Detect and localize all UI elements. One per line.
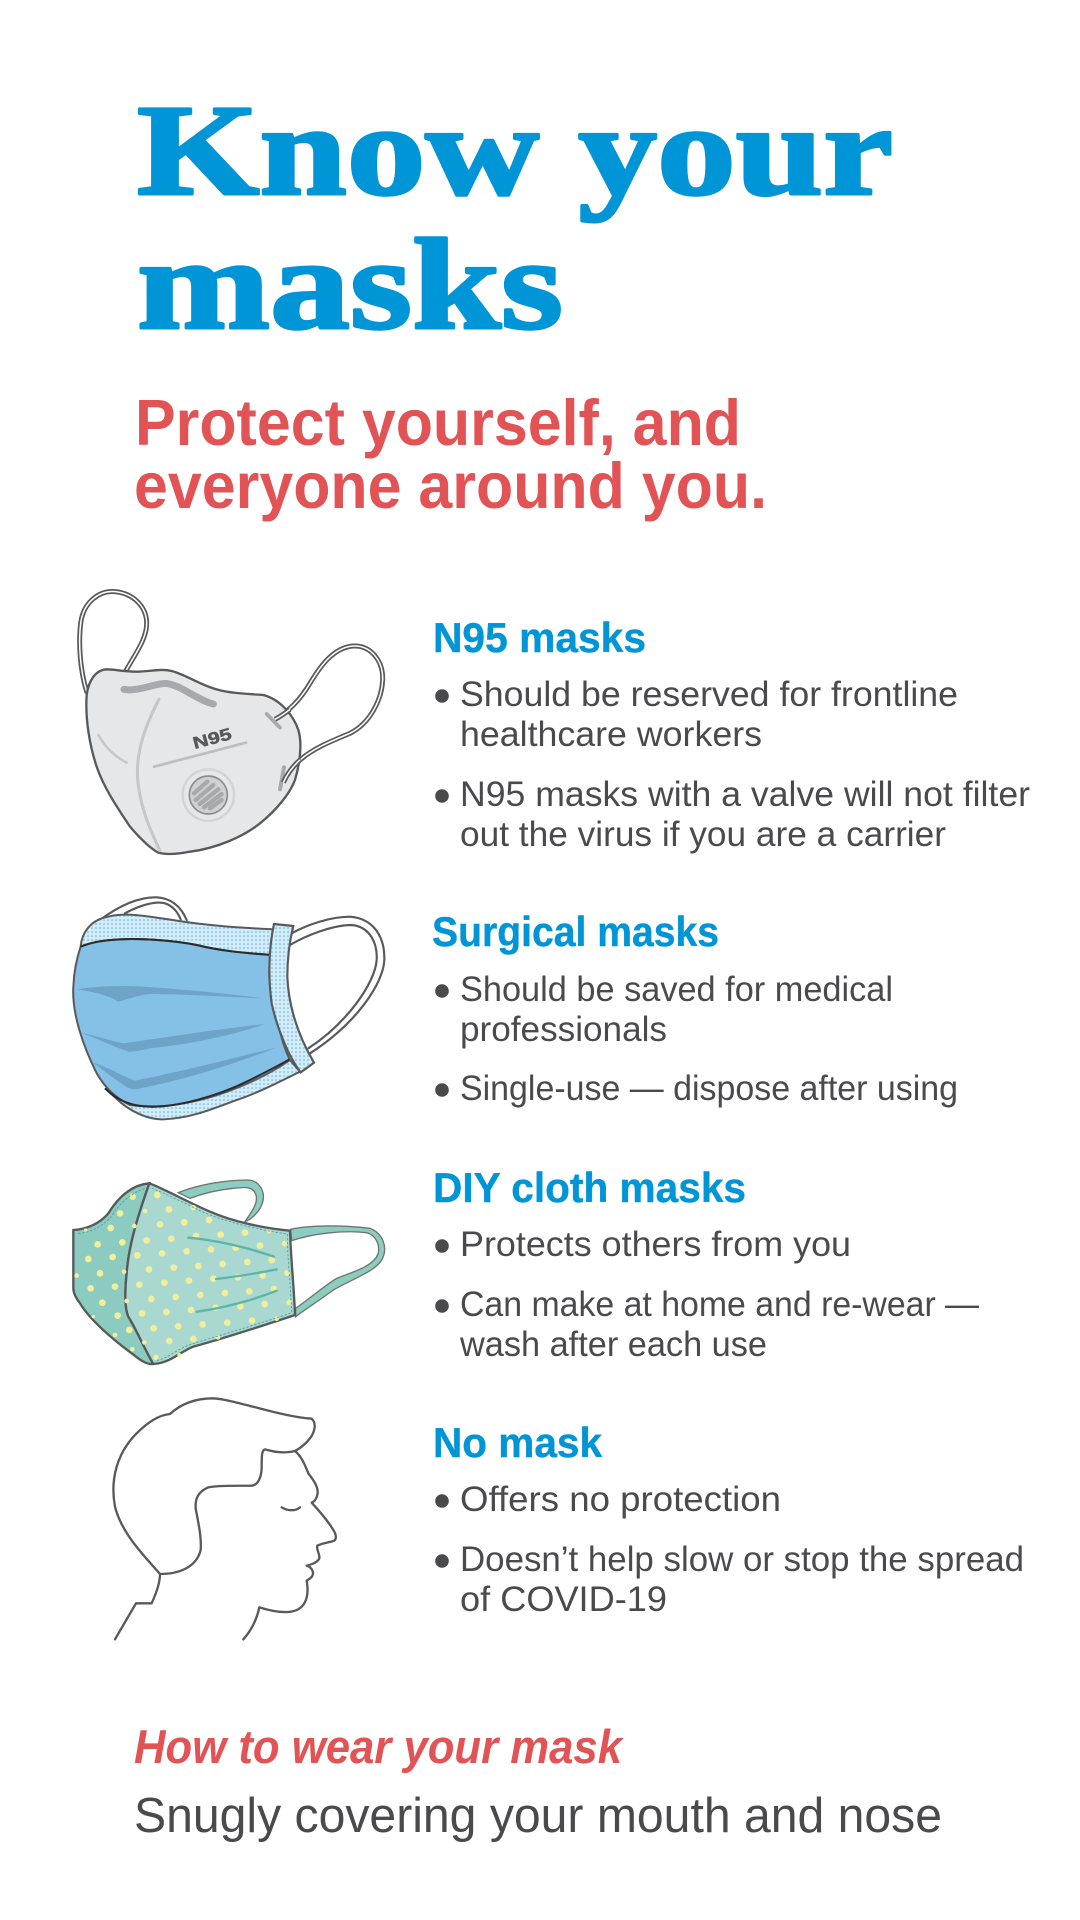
bullets: DIY cloth masks	[435, 1225, 979, 1364]
heading: No mask: No mask	[433, 1419, 603, 1466]
bullets: N95 masks: Should be reserved for frontline	[460, 675, 958, 714]
panel: Surgical masks	[73, 897, 958, 1119]
title: masks	[137, 213, 563, 357]
heading: DIY cloth masks: DIY cloth masks	[433, 1164, 746, 1211]
bullets: N95 masks: N95 masks with a valve will not filter	[460, 775, 1030, 814]
panel: N95 masks	[80, 592, 1030, 854]
bullets: DIY cloth masks: wash after each use	[459, 1325, 767, 1364]
icon: head profile without mask	[113, 1398, 336, 1639]
title	[137, 79, 893, 357]
bullets: Surgical masks: professionals	[460, 1010, 667, 1049]
icon: surgical mask	[73, 897, 384, 1119]
bullets: No mask	[435, 1480, 1024, 1619]
title: Know your	[137, 79, 893, 223]
bullets: Surgical masks: Single-use — dispose after using	[460, 1069, 958, 1108]
icon: N95 mask	[80, 592, 383, 854]
bullets: Surgical masks: Should be saved for medical	[460, 970, 893, 1009]
bullets: No mask: of COVID-19	[460, 1580, 667, 1619]
callout text: Snugly covering your mouth and nose	[134, 1789, 942, 1843]
subtitle	[134, 386, 767, 522]
callout heading: How to wear your mask	[134, 1720, 625, 1773]
subtitle: Protect yourself, and	[135, 386, 741, 459]
callout: how to wear your mask	[134, 1720, 942, 1843]
bullets: N95 masks: healthcare workers	[460, 715, 762, 754]
bullets: DIY cloth masks: Protects others from you	[460, 1225, 851, 1264]
panel: DIY cloth masks	[73, 1164, 979, 1364]
panel: No mask	[113, 1398, 1024, 1639]
heading: Surgical masks: Surgical masks	[432, 908, 719, 955]
bullets: No mask: Offers no protection	[460, 1480, 781, 1519]
bullets: DIY cloth masks: Can make at home and re-wear —	[460, 1285, 979, 1324]
heading: N95 masks: N95 masks	[433, 614, 646, 661]
bullets: No mask: Doesn’t help slow or stop the spread	[460, 1540, 1024, 1579]
bullets: N95 masks: out the virus if you are a carrier	[460, 815, 946, 854]
icon: N95 mask: N95	[191, 724, 234, 753]
bullets: Surgical masks	[435, 970, 958, 1108]
icon: cloth mask	[73, 1180, 385, 1364]
subtitle: everyone around you.	[134, 449, 767, 522]
bullets: N95 masks	[435, 675, 1030, 854]
